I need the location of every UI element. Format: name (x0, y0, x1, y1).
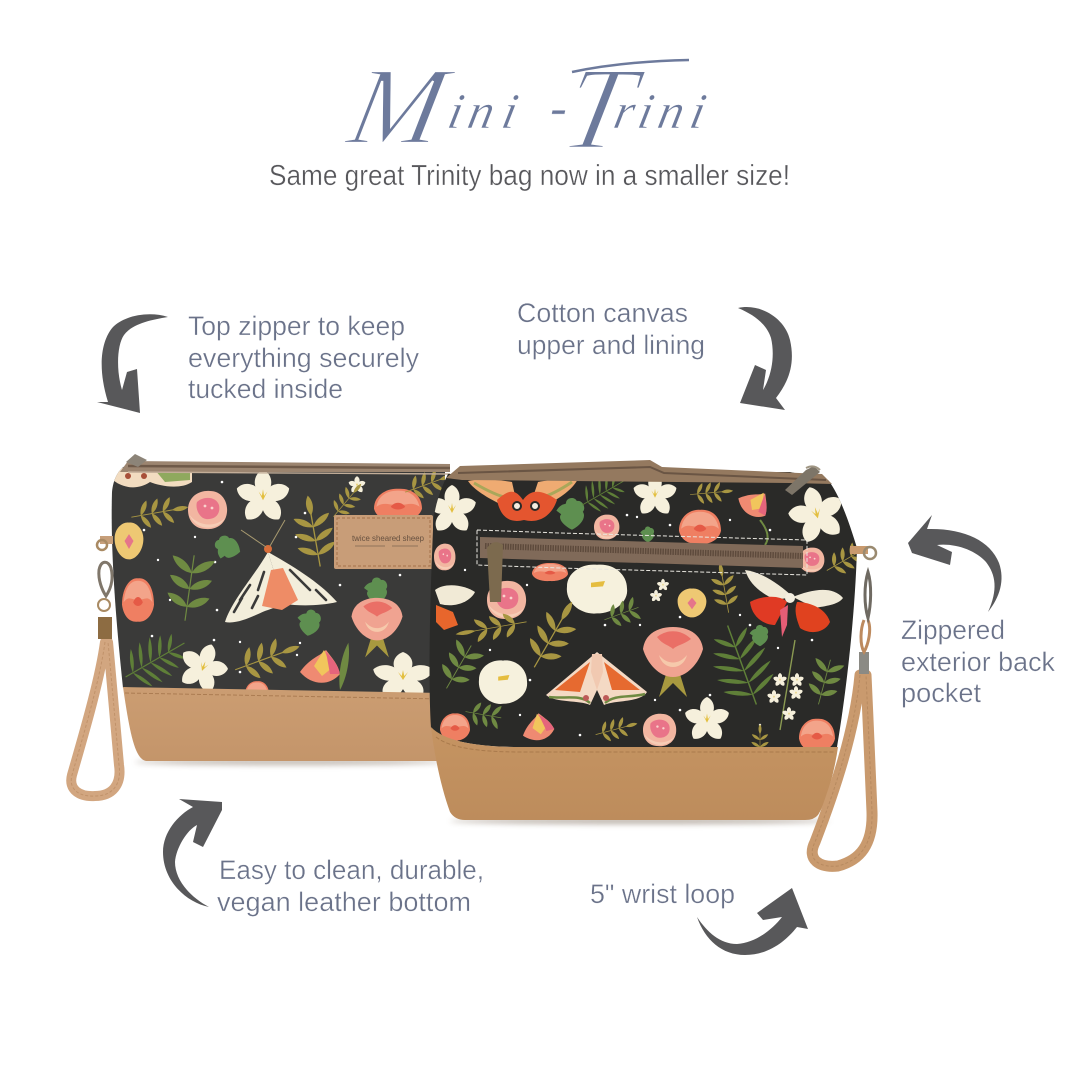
front bag fabric (430, 472, 857, 747)
front bag wrist strap (812, 547, 876, 866)
text: back pocket: Zippered (901, 615, 1005, 645)
callout: cotton canvas (517, 298, 792, 410)
title: - (545, 79, 574, 135)
text: back pocket: exterior back (901, 647, 1055, 677)
callout: vegan leather (163, 799, 484, 917)
shadow: front bag (450, 818, 830, 824)
moth: top orange (468, 479, 578, 521)
title: T (552, 43, 653, 174)
text: cotton canvas: upper and lining (517, 330, 705, 360)
arrow: cotton canvas (738, 307, 792, 410)
moth: bottom (546, 652, 647, 705)
text: wrist loop: 5" wrist loop (590, 879, 735, 909)
leather label: twice sheared sheep (352, 534, 425, 543)
back bag leather stitching (125, 693, 442, 699)
title: M (337, 46, 462, 168)
back bag (71, 454, 457, 796)
text: top zipper: everything securely (188, 343, 419, 373)
front bag leather bottom (431, 727, 838, 820)
arrow: back pocket (908, 515, 1002, 612)
zipper pull (487, 542, 503, 602)
leather stitching (436, 737, 835, 752)
moth: white (225, 520, 337, 622)
back bag zipper (120, 454, 450, 474)
text: top zipper: tucked inside (188, 374, 343, 404)
title (336, 43, 720, 174)
text: vegan leather: Easy to clean, durable, (219, 855, 484, 885)
text: back pocket: pocket (901, 678, 981, 708)
title: ini (443, 83, 535, 139)
back bag leather bottom (123, 687, 442, 761)
subtitle: Same great Trinity bag now in a smaller size! (269, 160, 790, 192)
arrow: vegan leather (163, 799, 222, 907)
callout: wrist loop (590, 879, 808, 955)
shadow: back bag (135, 759, 445, 765)
arrow: wrist loop (697, 888, 808, 955)
moth: orange partial (435, 585, 475, 630)
callout: back pocket (901, 515, 1055, 708)
callout: top zipper (97, 311, 419, 413)
back bag wrist strap (71, 540, 120, 796)
back pocket zipper (477, 530, 807, 602)
text: cotton canvas: Cotton canvas (517, 298, 688, 328)
text: top zipper: Top zipper to keep (188, 311, 405, 341)
text: vegan leather: vegan leather bottom (217, 887, 471, 917)
arrow: top zipper (97, 314, 168, 413)
front bag top zipper (446, 460, 832, 495)
leather label (334, 515, 433, 569)
title: rini (609, 83, 711, 139)
back bag fabric (112, 466, 445, 693)
moth: red (745, 570, 843, 637)
front bag (425, 460, 877, 866)
